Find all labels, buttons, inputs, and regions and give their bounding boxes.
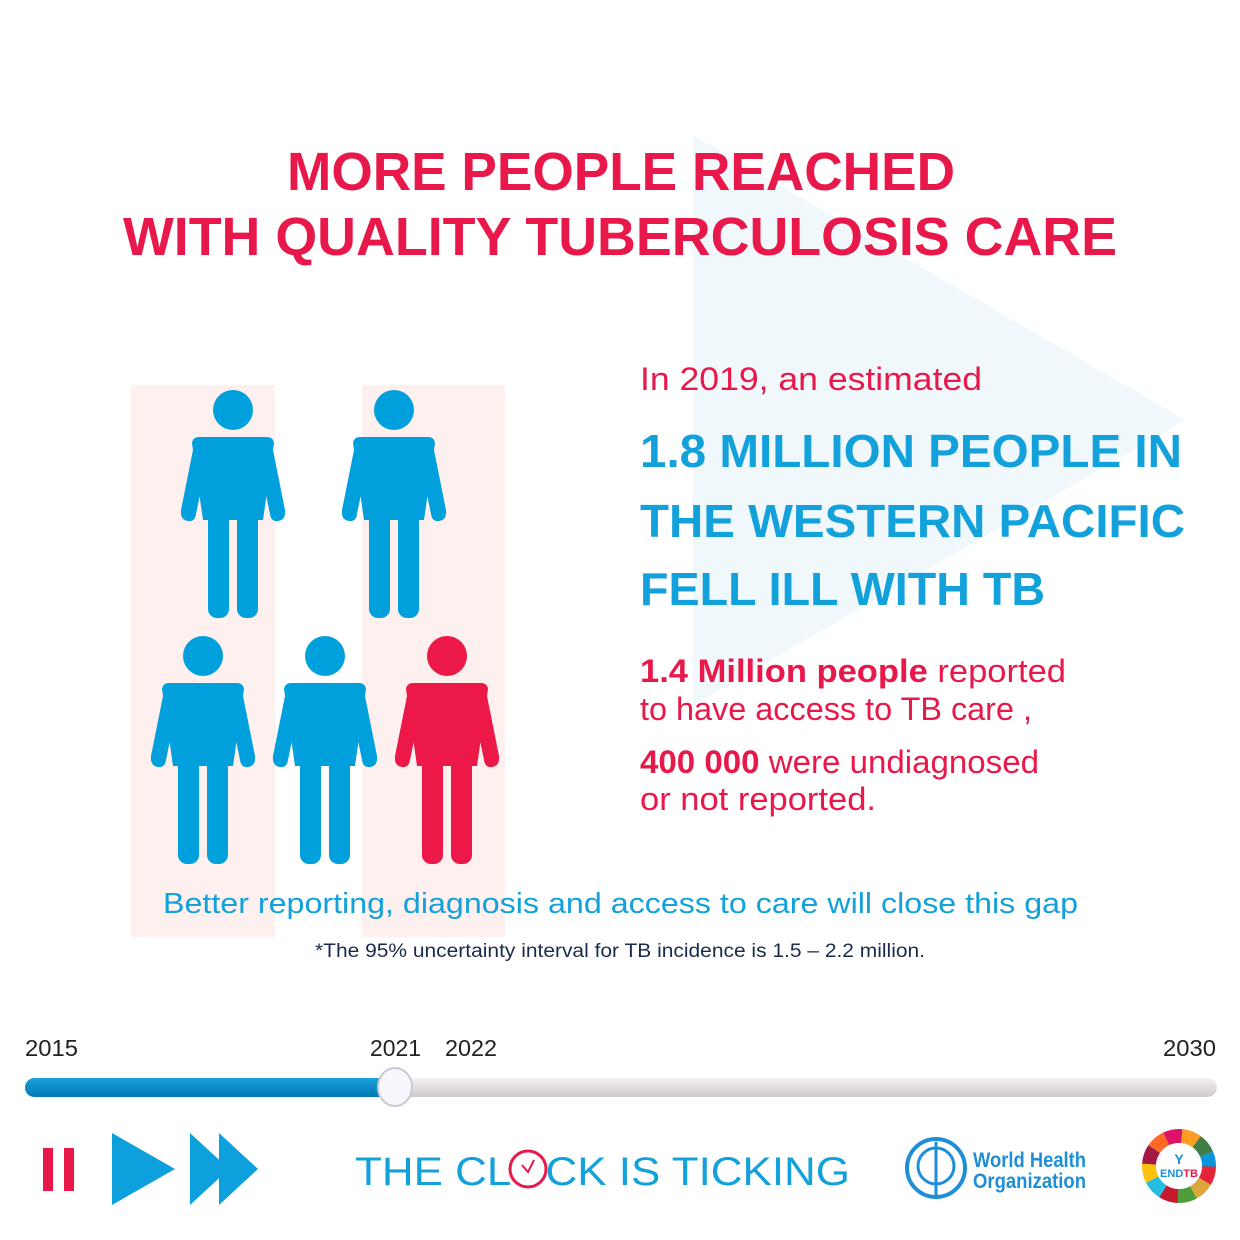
- people icons: [151, 390, 499, 864]
- WHO logo: [907, 1139, 1086, 1197]
- WHO logo: World Health: [973, 1149, 1086, 1172]
- pink bands: [131, 385, 505, 937]
- timeline years: [25, 1035, 1216, 1061]
- detail text: to have access to TB care ,: [640, 691, 1032, 727]
- End TB logo: [1149, 1136, 1209, 1196]
- timeline years: 2030: [1163, 1035, 1216, 1061]
- icon: fast forward: [190, 1133, 258, 1205]
- headline stat: [640, 425, 1185, 615]
- detail text: [640, 653, 1066, 817]
- clock is ticking: THE CL OCK IS TICKING: [355, 1150, 850, 1194]
- detail text: 1.4 Million people reported: [640, 653, 1066, 689]
- timeline years: 2021: [370, 1035, 421, 1061]
- timeline years: 2015: [25, 1035, 78, 1061]
- intro text: In 2019, an estimated: [640, 361, 982, 397]
- gap statement: Better reporting, diagnosis and access to care will close this gap: [163, 888, 1078, 920]
- detail text: 400 000 were undiagnosed: [640, 744, 1039, 780]
- title: [123, 142, 1117, 267]
- End TB logo: ENDTB: [1160, 1168, 1198, 1180]
- icon: play: [112, 1133, 175, 1205]
- footnote: *The 95% uncertainty interval for TB incidence is 1.5 – 2.2 million.: [315, 941, 925, 962]
- timeline slider: [25, 1068, 1217, 1106]
- End TB logo: Y: [1174, 1151, 1184, 1167]
- headline stat: THE WESTERN PACIFIC: [640, 495, 1185, 547]
- timeline years: 2022: [445, 1035, 497, 1061]
- title: WITH QUALITY TUBERCULOSIS CARE: [123, 207, 1117, 267]
- title: MORE PEOPLE REACHED: [287, 142, 955, 202]
- detail text: or not reported.: [640, 781, 876, 817]
- WHO logo: Organization: [973, 1170, 1086, 1193]
- background triangle: [693, 135, 1185, 705]
- icon: pause: [43, 1148, 74, 1191]
- headline stat: FELL ILL WITH TB: [640, 563, 1045, 615]
- headline stat: 1.8 MILLION PEOPLE IN: [640, 425, 1182, 477]
